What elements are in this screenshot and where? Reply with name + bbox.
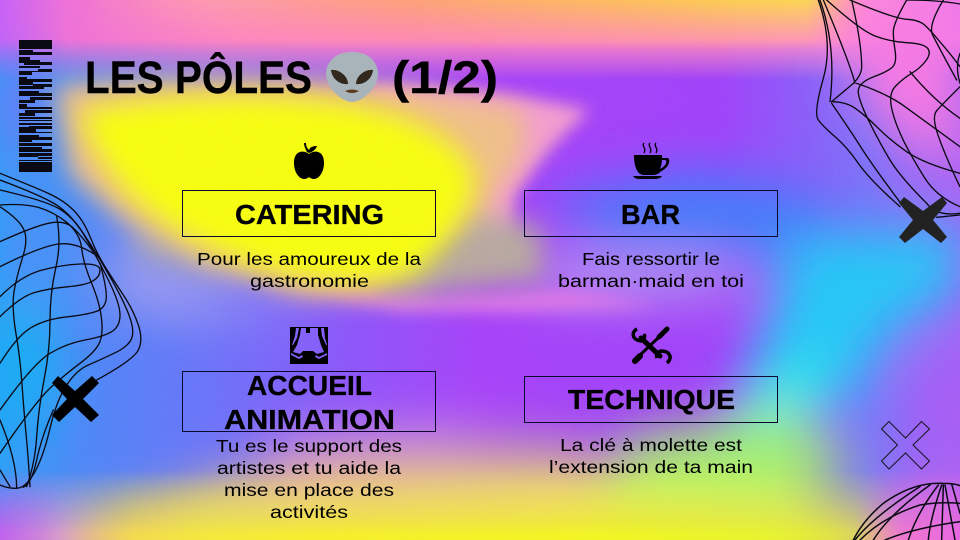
heading: catering: CATERING xyxy=(235,199,384,230)
background: bottom yellow band xyxy=(0,470,960,540)
title: LES PÔLES xyxy=(85,52,312,103)
text: catering description: gastronomie xyxy=(250,271,369,291)
icon: black cross left xyxy=(52,376,99,422)
text: accueil description: Tu es le support des xyxy=(216,436,402,456)
panel: technique xyxy=(524,329,778,477)
background: top pink band xyxy=(0,0,960,80)
text: bar description: barman·maid en toi xyxy=(558,271,744,291)
text: catering description xyxy=(197,249,421,291)
panel: catering xyxy=(182,143,436,291)
icon: outlined cross xyxy=(882,422,930,469)
box: catering xyxy=(182,190,436,236)
text: catering description: Pour les amoureux de la xyxy=(197,249,421,269)
heading: accueil: ACCUEIL xyxy=(247,370,372,401)
text: technique description: La clé à molette est xyxy=(560,435,742,455)
net: left xyxy=(0,173,141,488)
text: accueil description: mise en place des xyxy=(224,480,394,500)
icon: coffee cup xyxy=(633,143,669,179)
net: bottom right globe xyxy=(853,483,960,540)
text: technique description: l’extension de ta main xyxy=(549,457,753,477)
icon: apple xyxy=(294,143,324,179)
title suffix: (1/2) xyxy=(392,52,498,103)
panel: accueil animation xyxy=(182,327,436,522)
text: accueil description xyxy=(216,436,402,522)
text: accueil description: activités xyxy=(270,502,348,522)
barcode xyxy=(19,40,52,172)
icon: wrench and screwdriver xyxy=(633,329,670,363)
icon: theatre curtains xyxy=(290,327,328,364)
box: accueil animation xyxy=(182,372,436,432)
background: top orange band xyxy=(106,0,860,47)
net: top right xyxy=(817,0,960,217)
heading: bar: BAR xyxy=(621,199,680,230)
icon: dark cross top right xyxy=(899,197,947,243)
text: bar description xyxy=(558,249,744,291)
text: technique description xyxy=(549,435,753,477)
box: bar xyxy=(524,190,778,236)
text: accueil description: artistes et tu aide la xyxy=(217,458,401,478)
text: bar description: Fais ressortir le xyxy=(582,249,720,269)
heading: technique: TECHNIQUE xyxy=(568,384,735,415)
heading: animation: ANIMATION xyxy=(224,404,395,435)
icon: alien emoji xyxy=(326,52,378,102)
panel: bar xyxy=(524,143,778,291)
box: technique xyxy=(524,376,778,422)
